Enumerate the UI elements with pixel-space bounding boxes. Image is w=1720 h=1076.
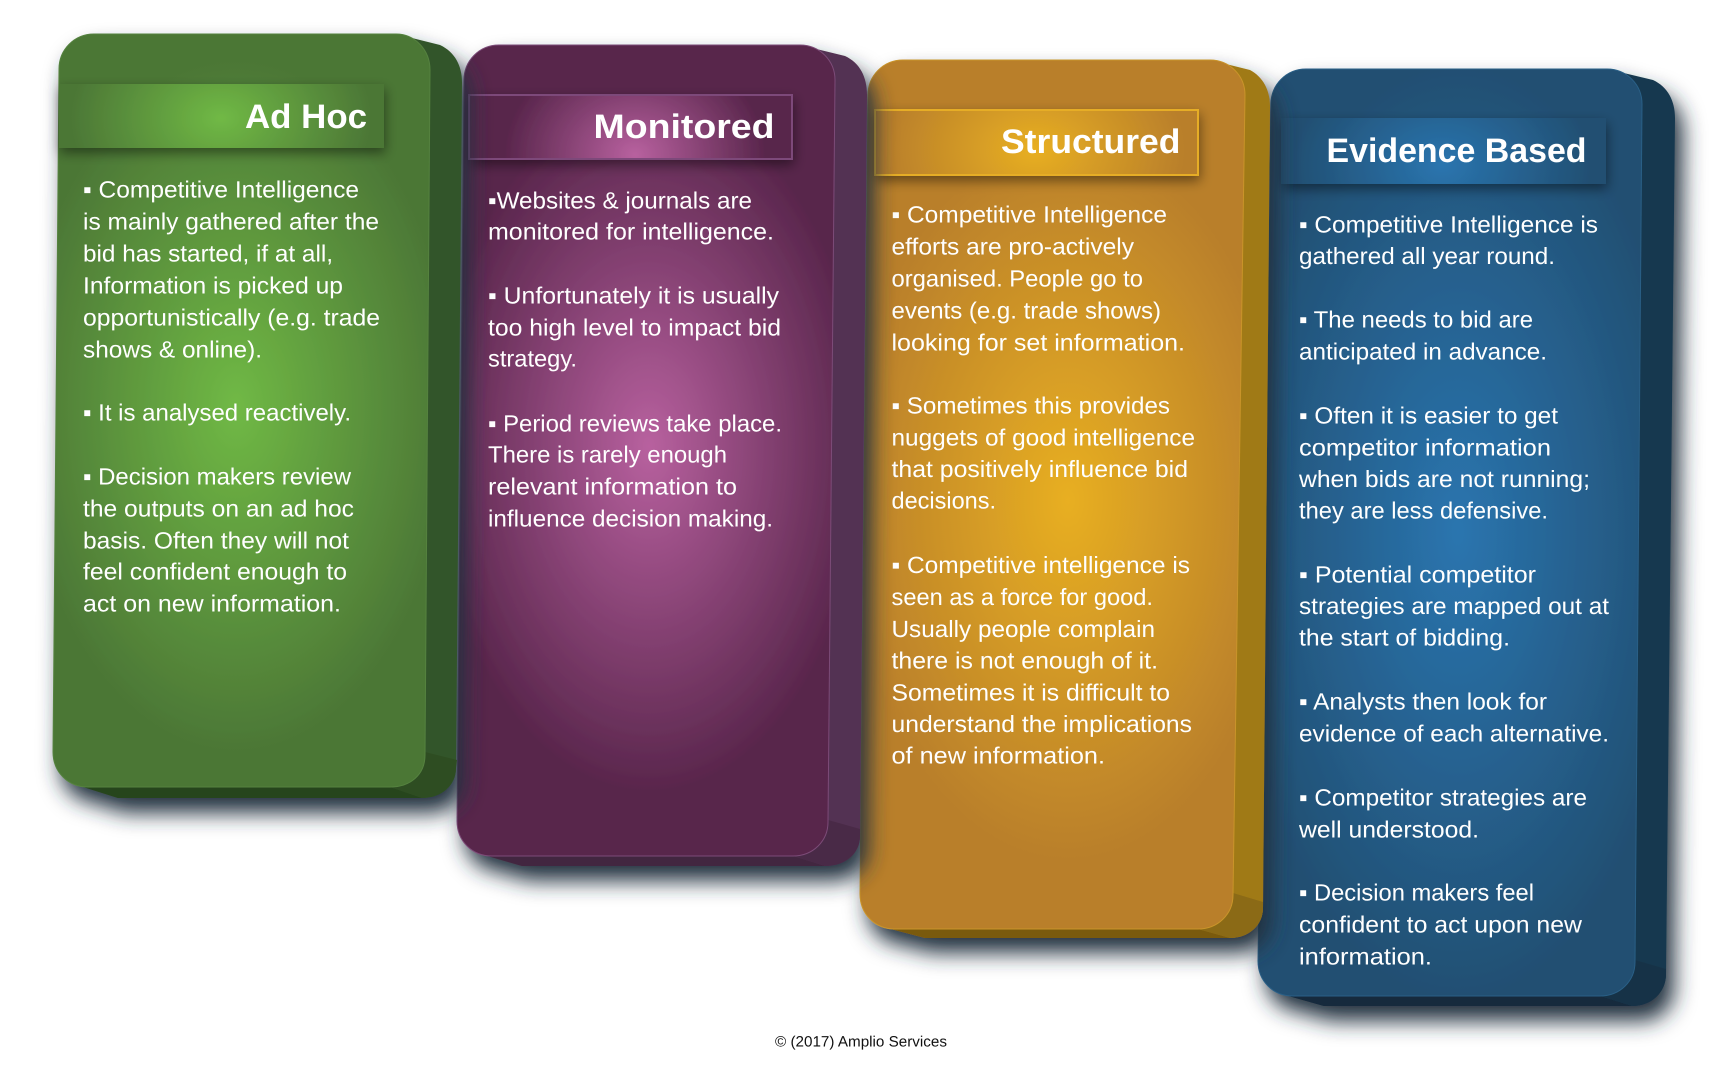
text block: Structured bullets: events (e.g. trade shows): [892, 298, 1161, 324]
text block: Structured bullets: Sometimes it is difficult to: [892, 680, 1170, 706]
text block: Monitored bullets: strategy.: [488, 345, 577, 371]
text block: Monitored bullets: ▪Websites & journals are: [488, 187, 752, 213]
text block: Evidence Based bullets: evidence of each alternative.: [1299, 720, 1609, 746]
text block: Evidence Based bullets: ▪ Competitive Intelligence is: [1299, 211, 1598, 237]
text block: Ad Hoc bullets: feel confident enough to: [83, 558, 347, 584]
text block: Evidence Based bullets: competitor information: [1299, 434, 1551, 460]
text block: Structured bullets: of new information.: [892, 743, 1105, 769]
text block: Structured bullets: that positively influence bid: [892, 456, 1188, 482]
text block: Monitored bullets: ▪ Unfortunately it is usually: [488, 282, 779, 308]
text block: Structured bullets: ▪ Competitive Intelligence: [892, 202, 1167, 228]
text block: Evidence Based bullets: anticipated in advance.: [1299, 338, 1547, 364]
3D card body: Evidence Based: [1258, 69, 1675, 1006]
text block: Ad Hoc bullets: shows & online).: [83, 336, 262, 362]
text block: Structured bullets: there is not enough of it.: [892, 648, 1158, 674]
text block: Evidence Based bullets: [1298, 211, 1609, 969]
text block: Monitored bullets: too high level to impact bid: [488, 314, 781, 340]
text block: Monitored bullets: influence decision making.: [488, 505, 773, 531]
text block: Ad Hoc bullets: opportunistically (e.g. trade: [83, 304, 380, 330]
text block: Evidence Based bullets: confident to act upon new: [1299, 911, 1583, 937]
heading: Monitored: Monitored: [594, 108, 774, 146]
text block: Monitored bullets: There is rarely enough: [488, 441, 727, 467]
text block: Ad Hoc bullets: is mainly gathered after the: [83, 208, 379, 234]
text block: Structured bullets: Usually people complain: [892, 616, 1155, 642]
text block: Evidence Based bullets: ▪ The needs to bid are: [1299, 306, 1533, 332]
text block: Monitored bullets: ▪ Period reviews take place.: [488, 410, 782, 436]
text block: Evidence Based bullets: information.: [1299, 943, 1432, 969]
3D card body: Structured: [860, 60, 1270, 938]
panel: Evidence Based: [1258, 69, 1675, 1006]
heading: Ad Hoc: [59, 84, 384, 148]
text block: Ad Hoc bullets: ▪ Competitive Intelligence: [83, 176, 359, 202]
panel: Ad Hoc: [53, 34, 462, 798]
text block: Evidence Based bullets: strategies are mapped out at: [1299, 593, 1609, 619]
3D card body: Monitored: [457, 45, 867, 866]
heading: Evidence Based: [1281, 118, 1606, 184]
text block: Ad Hoc bullets: bid has started, if at all,: [83, 240, 333, 266]
text block: Ad Hoc bullets: the outputs on an ad hoc: [83, 495, 354, 521]
text block: Structured bullets: seen as a force for good.: [892, 584, 1153, 610]
text block: Structured bullets: nuggets of good intelligence: [892, 425, 1195, 451]
heading: Ad Hoc: Ad Hoc: [245, 98, 367, 136]
text block: Evidence Based bullets: ▪ Decision makers feel: [1299, 879, 1534, 905]
text block: Structured bullets: decisions.: [892, 488, 996, 514]
text block: Monitored bullets: monitored for intelligence.: [488, 218, 774, 244]
text block: Monitored bullets: [488, 187, 782, 531]
text block: Structured bullets: [892, 202, 1195, 769]
text block: Ad Hoc bullets: basis. Often they will not: [83, 527, 349, 553]
heading: Structured: [875, 110, 1198, 175]
text block: Ad Hoc bullets: Information is picked up: [83, 272, 343, 298]
text block: Structured bullets: ▪ Competitive intelligence is: [892, 552, 1190, 578]
text block: Structured bullets: efforts are pro-actively: [892, 234, 1134, 260]
panel: Monitored: [457, 45, 867, 866]
text block: Evidence Based bullets: gathered all year round.: [1299, 243, 1555, 269]
text block: Ad Hoc bullets: act on new information.: [83, 590, 341, 616]
text block: Evidence Based bullets: when bids are not running;: [1298, 466, 1590, 492]
copyright footer: © (2017) Amplio Services: [775, 1034, 947, 1050]
text block: Evidence Based bullets: they are less defensive.: [1299, 497, 1548, 523]
text block: Structured bullets: understand the implications: [892, 711, 1192, 737]
text block: Evidence Based bullets: the start of bidding.: [1299, 624, 1510, 650]
text block: Structured bullets: looking for set information.: [892, 330, 1185, 356]
text block: Monitored bullets: relevant information to: [488, 473, 737, 499]
text block: Ad Hoc bullets: [83, 176, 380, 616]
heading: Evidence Based: Evidence Based: [1326, 132, 1586, 170]
heading: Monitored: [469, 95, 792, 159]
text block: Structured bullets: organised. People go to: [892, 266, 1143, 292]
text block: Evidence Based bullets: ▪ Potential competitor: [1299, 561, 1536, 587]
text block: Evidence Based bullets: ▪ Competitor strategies are: [1299, 784, 1587, 810]
text block: Ad Hoc bullets: ▪ It is analysed reactively.: [83, 399, 351, 425]
text block: Evidence Based bullets: well understood.: [1298, 816, 1479, 842]
text block: Ad Hoc bullets: ▪ Decision makers review: [83, 463, 352, 489]
heading: Structured: Structured: [1001, 123, 1180, 161]
3D card body: Ad Hoc: [53, 34, 462, 798]
text block: Structured bullets: ▪ Sometimes this provides: [892, 393, 1170, 419]
text block: Evidence Based bullets: ▪ Often it is easier to get: [1299, 402, 1558, 428]
text block: Evidence Based bullets: ▪ Analysts then look for: [1299, 688, 1547, 714]
panel: Structured: [860, 60, 1270, 938]
